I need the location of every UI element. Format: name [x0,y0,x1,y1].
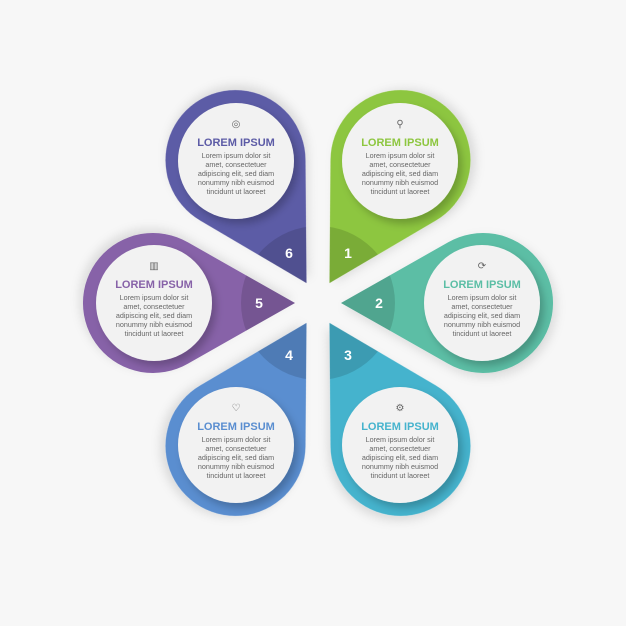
card 1: LOREM IPSUM [361,137,439,149]
card 5: amet, consectetuer [123,302,185,311]
card 2: LOREM IPSUM [443,279,521,291]
card 3 [342,387,458,503]
petal 3 [269,288,496,542]
card 5: tincidunt ut laoreet [125,329,183,338]
card 3: adipiscing elit, sed diam [362,453,438,462]
petal 1 [269,64,496,318]
card 6: adipiscing elit, sed diam [198,169,274,178]
card 3: Lorem ipsum dolor sit [366,435,434,444]
card 2: adipiscing elit, sed diam [444,311,520,320]
card 1: ⚲ [396,119,404,130]
card 1: Lorem ipsum dolor sit [366,151,434,160]
card 4: amet, consectetuer [205,444,267,453]
petal 4 [140,288,367,542]
card 5: adipiscing elit, sed diam [116,311,192,320]
card 2: amet, consectetuer [451,302,513,311]
numbers: 2 [375,295,383,311]
petal 2 [341,233,553,373]
card 5: nonummy nibh euismod [116,320,192,329]
card 4 [178,387,294,503]
card 1: adipiscing elit, sed diam [362,169,438,178]
card 5 [96,245,212,361]
card 4: LOREM IPSUM [197,421,275,433]
card 5: ▥ [149,261,159,272]
numbers [255,245,383,363]
petal 6 [140,64,367,318]
card 3: LOREM IPSUM [361,421,439,433]
card 6: amet, consectetuer [205,160,267,169]
card 6: nonummy nibh euismod [198,178,274,187]
card 6: tincidunt ut laoreet [207,187,265,196]
numbers: 6 [285,245,293,261]
numbers: 1 [344,245,352,261]
card 4: nonummy nibh euismod [198,462,274,471]
numbers: 4 [285,347,293,363]
card 4: adipiscing elit, sed diam [198,453,274,462]
card 2: ⟳ [478,261,487,272]
card 4: Lorem ipsum dolor sit [202,435,270,444]
card 6: Lorem ipsum dolor sit [202,151,270,160]
card 3: nonummy nibh euismod [362,462,438,471]
card 4: tincidunt ut laoreet [207,471,265,480]
card 3: tincidunt ut laoreet [371,471,429,480]
card 5: LOREM IPSUM [115,279,193,291]
center darker ring [241,227,395,379]
numbers: 3 [344,347,352,363]
petal 5 [83,233,295,373]
card 3: ⚙ [396,403,404,414]
card 2 [424,245,540,361]
card 1 [342,103,458,219]
card 2: nonummy nibh euismod [444,320,520,329]
card 6: LOREM IPSUM [197,137,275,149]
card 3: amet, consectetuer [369,444,431,453]
card 1: nonummy nibh euismod [362,178,438,187]
card 1: tincidunt ut laoreet [371,187,429,196]
numbers: 5 [255,295,263,311]
card 1: amet, consectetuer [369,160,431,169]
card 4: ♡ [232,403,241,414]
card 2: tincidunt ut laoreet [453,329,511,338]
card 2: Lorem ipsum dolor sit [448,293,516,302]
card 6: ◎ [232,119,240,130]
card 5: Lorem ipsum dolor sit [120,293,188,302]
card 6 [178,103,294,219]
